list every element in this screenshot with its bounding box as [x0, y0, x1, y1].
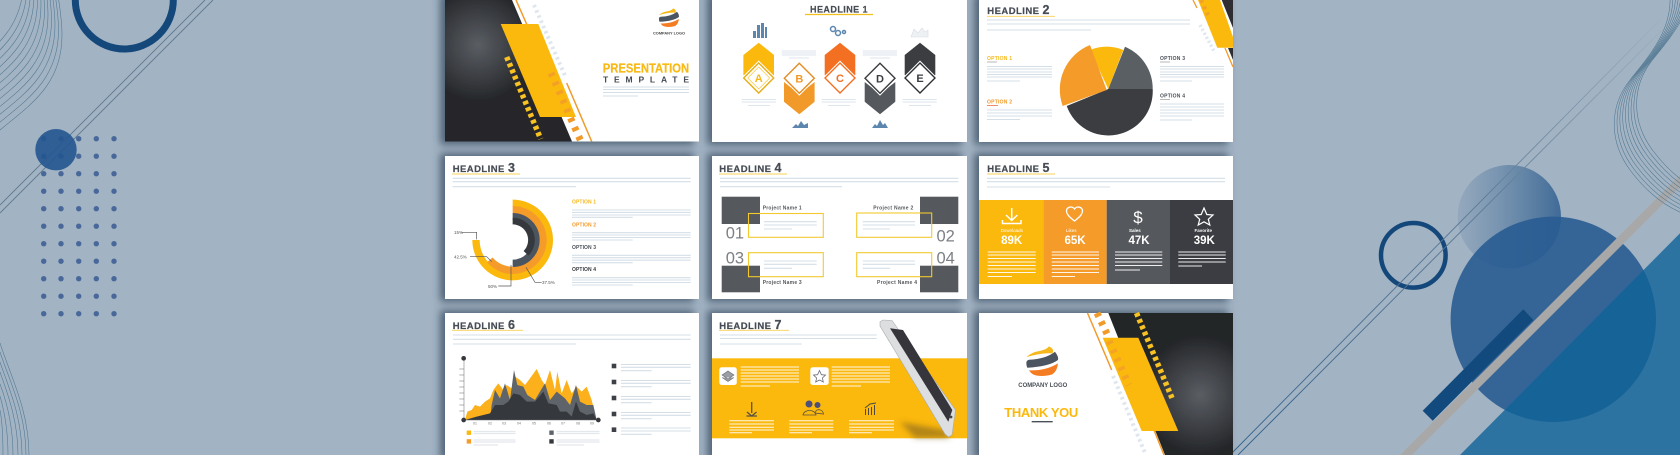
option 2	[987, 100, 1052, 120]
heading: HEADLINE 6	[453, 318, 515, 332]
project 2	[857, 197, 958, 246]
stat: downloads: 89K	[1001, 235, 1023, 247]
hexagon D: D	[876, 73, 884, 85]
hexagon A: A	[755, 73, 763, 85]
project 2: Project Name 2	[873, 206, 914, 212]
stat: likes: 65K	[1064, 235, 1086, 247]
large blue circle	[1451, 217, 1656, 422]
pie chart	[1060, 45, 1153, 136]
option 2: OPTION 2	[572, 222, 596, 228]
hexagon C	[822, 43, 858, 96]
option 2: OPTION 2	[987, 100, 1012, 106]
axis labels: 04	[517, 422, 521, 426]
hexagon B	[782, 61, 817, 114]
project 1: Project Name 1	[763, 206, 802, 212]
underline	[1032, 421, 1053, 423]
stat: likes: Likes	[1066, 228, 1077, 233]
double diagonal lines right	[1233, 37, 1648, 455]
ring top left	[75, 0, 173, 49]
inner dashes	[551, 73, 569, 114]
panel: headline 7 phone	[712, 313, 967, 455]
wave lines bottom left	[0, 343, 29, 455]
dark cover shape	[445, 0, 572, 142]
yellow parallelogram	[501, 24, 576, 117]
orange dashes	[1097, 313, 1109, 338]
icon: people	[803, 400, 824, 415]
left background decoration	[0, 0, 213, 455]
cover text lines	[603, 87, 689, 96]
orange stripes	[1088, 313, 1164, 455]
project 3	[722, 249, 823, 292]
option 3: OPTION 3	[572, 245, 596, 251]
area chart	[459, 356, 601, 422]
intro lines	[987, 178, 1225, 187]
intro lines	[453, 178, 691, 187]
stat: sales	[1107, 200, 1170, 284]
yellow squares strip	[1136, 313, 1172, 398]
gradient circle	[1458, 165, 1561, 254]
option 3	[1160, 56, 1224, 81]
intro lines	[987, 20, 1190, 30]
panel: presentation template cover	[445, 0, 699, 142]
stat: sales: Sales	[1129, 228, 1141, 233]
dot grid	[41, 136, 117, 316]
icon: stack tile	[719, 367, 737, 385]
option 1: OPTION 1	[987, 56, 1012, 62]
project 3: 03	[726, 249, 744, 267]
blue triangle	[1460, 233, 1680, 455]
axis labels: 09	[590, 422, 594, 426]
heading: HEADLINE 3	[453, 161, 515, 175]
project 3: Project Name 3	[763, 280, 802, 286]
option 1	[987, 56, 1052, 81]
inner dashes	[1109, 341, 1129, 385]
project 2: 02	[936, 228, 955, 246]
hexagon C: C	[836, 73, 844, 85]
stat: favorite	[1170, 200, 1233, 284]
wave lines right	[1614, 0, 1680, 216]
light dashes	[1113, 376, 1145, 453]
right background decoration	[1230, 0, 1680, 455]
hexagon E	[902, 43, 938, 96]
radial chart	[462, 203, 549, 286]
ring right	[1381, 223, 1446, 288]
option 4: OPTION 4	[572, 267, 596, 273]
icon: download pin	[746, 402, 757, 416]
logo caption: COMPANY LOGO	[653, 32, 685, 36]
project 1	[722, 197, 823, 242]
stat: likes	[1043, 200, 1107, 284]
axis labels: 01	[473, 422, 477, 426]
icon: mini charts	[792, 120, 888, 128]
label 50%: 50%	[488, 284, 497, 289]
stat: favorite: 39K	[1194, 235, 1216, 247]
panel: thank you	[979, 313, 1233, 455]
icon: line chart	[911, 28, 928, 37]
heading: HEADLINE 7	[719, 318, 782, 332]
hexagon text lines	[742, 51, 937, 106]
project 4: Project Name 4	[877, 280, 917, 286]
phone shadow	[900, 422, 950, 438]
axis labels: 05	[532, 422, 536, 426]
heading: HEADLINE 2	[987, 3, 1050, 17]
option 1	[572, 200, 691, 217]
panel: headline 3 radial chart	[445, 156, 699, 299]
panel: headline 6 area chart	[445, 313, 699, 455]
checklist	[612, 364, 691, 434]
orange stripes	[516, 0, 592, 142]
option 1: OPTION 1	[572, 200, 596, 206]
yellow band	[712, 358, 967, 438]
chart legend	[467, 430, 600, 445]
axis labels: 08	[576, 422, 580, 426]
stat: sales: $	[1133, 208, 1143, 227]
stat: downloads: Downloads	[1001, 228, 1024, 233]
light dashes	[534, 5, 566, 78]
logo caption: COMPANY LOGO	[1018, 383, 1068, 389]
label 15%: 15%	[454, 230, 463, 235]
hexagon A	[741, 43, 776, 96]
heading: HEADLINE 1	[810, 4, 868, 16]
heading: HEADLINE 5	[987, 161, 1050, 175]
axis labels: 07	[561, 422, 565, 426]
axis labels: 02	[488, 422, 492, 426]
label 42.5%: 42.5%	[454, 254, 467, 260]
yellow parallelogram	[1103, 338, 1178, 431]
company logo	[659, 8, 679, 27]
panel: headline 5 stats	[979, 156, 1233, 299]
icon: bar chart	[753, 23, 767, 38]
grey diagonal band	[1400, 175, 1680, 455]
project 4	[857, 249, 958, 292]
panel drop shadows	[440, 0, 1228, 455]
dark closing shape	[1108, 313, 1233, 455]
heading: HEADLINE 4	[719, 161, 782, 175]
option 3	[572, 245, 691, 263]
project 4: 04	[936, 249, 955, 267]
hexagon E: E	[916, 73, 924, 85]
stat: sales: 47K	[1128, 235, 1150, 247]
hexagon D	[862, 61, 898, 114]
filled circle left	[35, 129, 77, 170]
option 4	[1160, 94, 1224, 120]
icon: gears	[830, 26, 846, 36]
panel: headline 4 projects	[712, 156, 967, 299]
label 37.5%: 37.5%	[542, 280, 555, 285]
icon: growth chart	[865, 403, 876, 415]
dark blue bar	[1423, 309, 1533, 421]
subtitle: TEMPLATE	[603, 74, 689, 84]
hexagon B: B	[795, 73, 803, 85]
phone	[880, 320, 956, 437]
corner accent	[1193, 0, 1233, 67]
option 4	[572, 267, 691, 285]
icon: star tile	[810, 367, 829, 385]
yellow squares strip	[507, 57, 541, 139]
stat: favorite: Favorite	[1194, 228, 1213, 233]
wave lines top left	[0, 0, 62, 130]
intro lines	[453, 335, 691, 344]
option 2	[572, 222, 691, 240]
title: PRESENTATION	[603, 62, 689, 76]
stat: downloads	[979, 200, 1043, 284]
intro lines	[720, 178, 958, 187]
double diagonal lines left	[0, 0, 213, 213]
company logo	[1026, 346, 1058, 376]
option 3: OPTION 3	[1160, 56, 1185, 62]
option 4: OPTION 4	[1160, 94, 1185, 100]
panel: headline 1 hexagons	[712, 0, 967, 142]
text lines in band	[729, 367, 894, 433]
axis labels: 03	[502, 422, 506, 426]
panel: headline 2 pie chart	[979, 0, 1233, 142]
project 1: 01	[726, 224, 744, 242]
intro lines	[720, 335, 877, 344]
axis labels: 06	[547, 422, 551, 426]
thank you: THANK YOU	[1004, 405, 1078, 420]
orange dashes	[570, 118, 581, 142]
